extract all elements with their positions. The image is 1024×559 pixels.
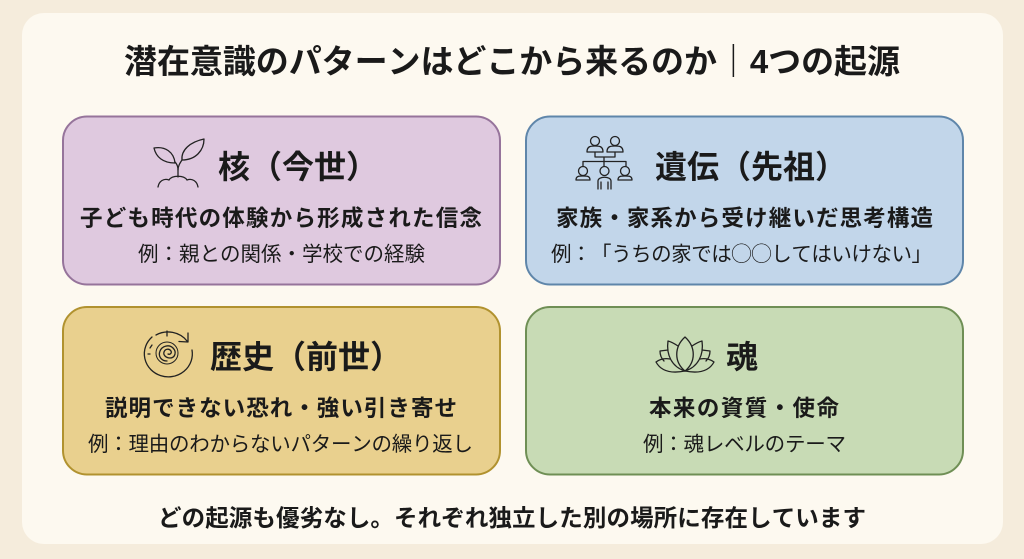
panel: 歴史（前世） xyxy=(63,307,500,474)
icon: sprout xyxy=(154,139,204,187)
example: 例：「うちの家では◯◯してはいけない」 xyxy=(551,243,932,266)
description: 家族・家系から受け継いだ思考構造 xyxy=(556,206,933,231)
footer message: どの起源も優劣なし。それぞれ独立した別の場所に存在しています xyxy=(158,505,866,531)
example: 例：魂レベルのテーマ xyxy=(643,433,846,456)
description: 子ども時代の体験から形成された信念 xyxy=(80,206,482,231)
icon: lotus xyxy=(656,337,714,372)
panel: 魂 xyxy=(526,307,963,474)
description: 本来の資質・使命 xyxy=(649,396,839,421)
title: 潜在意識のパターンはどこから来るのか｜4つの起源 xyxy=(124,43,900,80)
heading: 核（今世） xyxy=(218,149,378,185)
icon: family tree xyxy=(576,136,632,189)
description: 説明できない恐れ・強い引き寄せ xyxy=(105,396,457,421)
heading: 歴史（前世） xyxy=(210,339,402,375)
heading: 魂 xyxy=(726,339,758,375)
example: 例：親との関係・学校での経験 xyxy=(138,243,426,266)
heading: 遺伝（先祖） xyxy=(655,149,847,185)
panel: 遺伝（先祖） xyxy=(526,116,963,284)
example: 例：理由のわからないパターンの繰り返し xyxy=(88,433,473,456)
panel: 核（今世） xyxy=(63,116,500,284)
icon: spiral cycle xyxy=(144,331,192,377)
